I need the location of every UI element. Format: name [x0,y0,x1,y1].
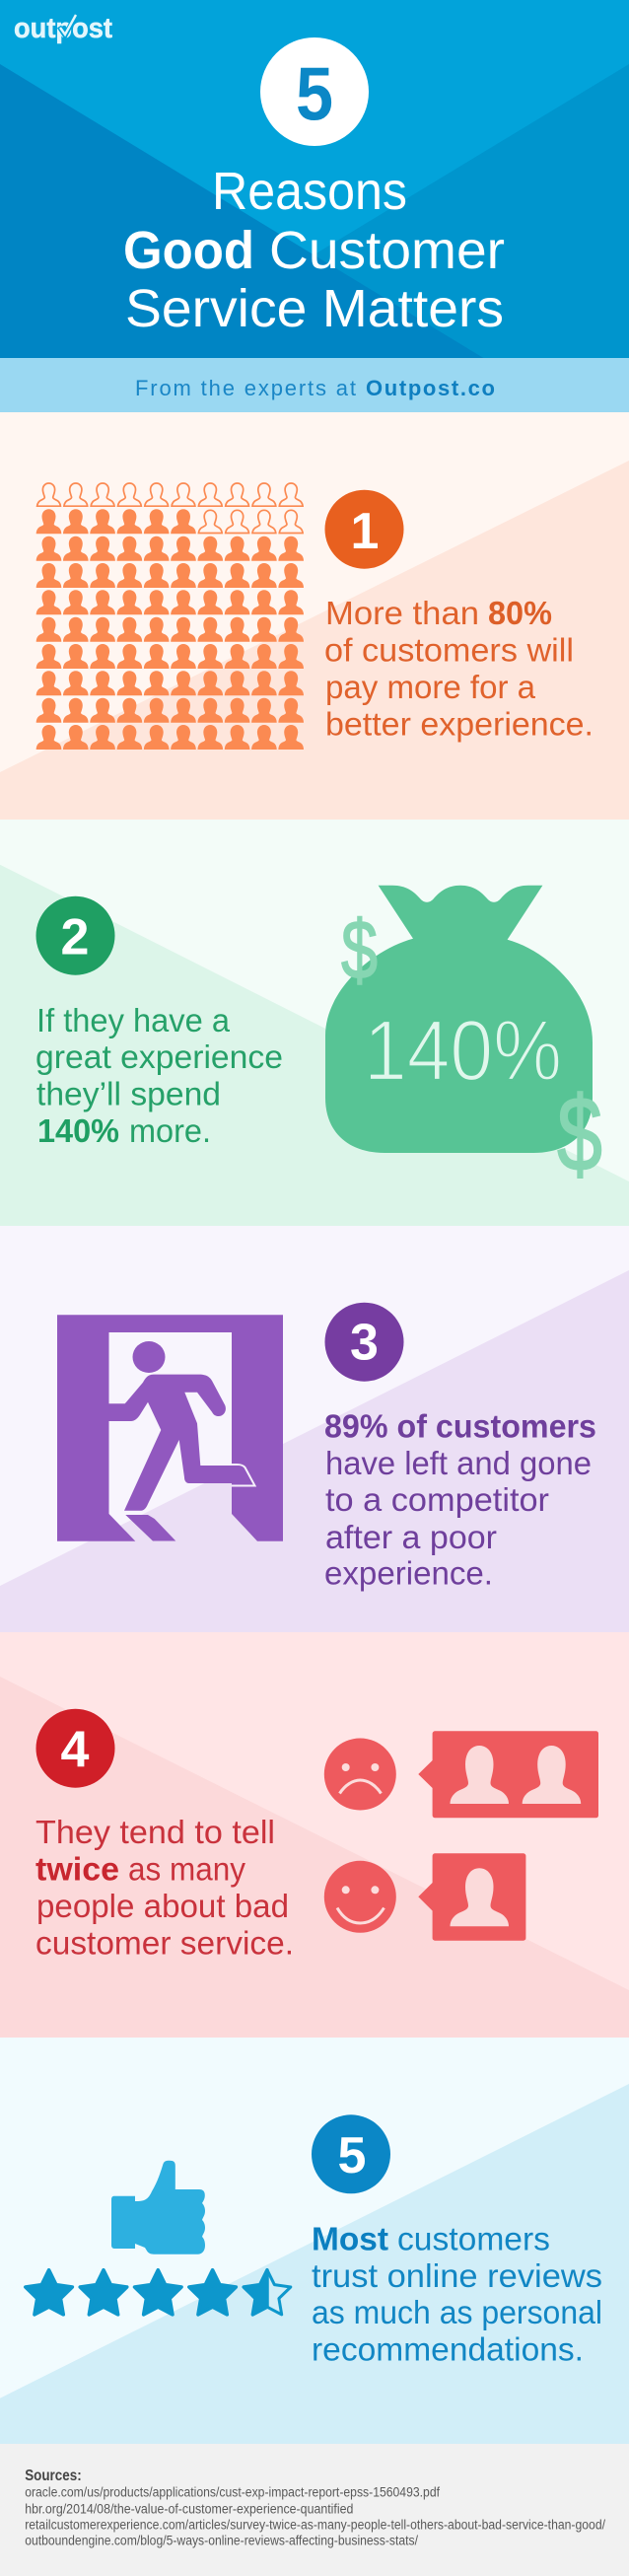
panel: reason 3 [0,1226,629,1632]
text: reason 4: as many [128,1851,245,1888]
text: reason 1: pay more for a [325,669,536,705]
header panel [0,0,629,359]
number badge: 4: 4 [61,1722,90,1779]
title: Reasons [212,162,407,221]
title: Service Matters [125,279,504,338]
text: reason 3: 89% of customers [324,1408,596,1445]
panel: reason 2 [0,820,629,1226]
subtitle band [0,358,629,412]
source links [25,2485,605,2548]
number badge: 5: 5 [338,2127,366,2184]
icon: thumbs up [111,2161,205,2254]
icon: sad face [324,1738,396,1811]
text: reason 5 [312,2221,602,2368]
text: reason 3: after a poor [325,1519,497,1555]
text: reason 3: have left and gone [325,1445,592,1481]
source links: oracle.com/us/products/applications/cust-exp-impact-report-epss-1560493.pdf [25,2485,440,2500]
icon: grid of 100 people, 86 filled [36,483,304,750]
number badge: 2 [35,896,114,975]
text: reason 2 [35,1002,283,1149]
title [123,162,505,338]
text: reason 3 [324,1408,596,1592]
number badge: 3: 3 [350,1314,379,1371]
text: reason 2: more. [129,1112,211,1149]
text: reason 3: experience. [324,1555,493,1592]
icon: money bag with 140%: 140% [364,1003,562,1099]
icon: speech bubble with two people [418,1731,598,1818]
number badge: 5 [260,37,369,146]
source links: outboundengine.com/blog/5-ways-online-reviews-affecting-business-stats/ [25,2534,418,2548]
icon: dollar sign, right: $ [557,1074,602,1193]
text: reason 5: as much as personal [312,2294,602,2330]
subtitle band: Outpost.co [366,376,495,400]
number badge: 1: 1 [351,503,379,560]
number badge: 2: 2 [61,909,89,966]
title: Good [123,221,254,280]
text: reason 2: they’ll spend [36,1076,221,1112]
number badge: 5 [312,2114,390,2193]
subtitle band: From the experts at [135,376,356,400]
text: reason 5: recommendations. [312,2331,584,2368]
text: reason 1: better experience. [325,706,594,742]
panel: sources: Sources: [25,2468,82,2484]
source links: hbr.org/2014/08/the-value-of-customer-experience-quantified [25,2501,353,2516]
text: reason 2: 140% [37,1112,119,1149]
panel: sources [0,2444,629,2576]
number badge: 3 [325,1303,404,1382]
panel: reason 1 [0,412,629,820]
title: Customer [269,221,505,280]
number badge: 5: 5 [296,53,333,136]
text: reason 2: If they have a [36,1002,231,1038]
text: reason 5: customers [397,2221,550,2257]
text: reason 4: They tend to tell [35,1814,275,1850]
text: reason 1 [324,595,594,742]
logo: outpost: outpost [14,13,112,44]
text: reason 1: More than [325,595,479,631]
number badge: 1 [325,490,404,569]
icon: dollar sign, left: $ [341,903,378,996]
text: reason 4: customer service. [35,1925,294,1962]
text: reason 5: trust online reviews [312,2257,602,2294]
panel: reason 5 [0,2038,629,2444]
panel: reason 4 [0,1632,629,2038]
icon: money bag with 140% [325,886,602,1193]
icon: happy face [324,1861,396,1933]
text: reason 4: twice [35,1851,119,1888]
number badge: 4 [35,1709,114,1788]
text: reason 4 [35,1814,294,1962]
text: reason 5: Most [312,2221,388,2257]
text: reason 4: people about bad [36,1888,289,1924]
text: reason 2: great experience [35,1038,283,1075]
icon: speech bubble with one person [418,1853,525,1941]
text: reason 1: of customers will [324,631,574,669]
text: reason 3: to a competitor [325,1481,549,1518]
icon: person running through exit door [57,1315,283,1541]
text: reason 1: 80% [488,595,552,631]
icon: star rating, 4.5 of 5 [26,2270,291,2315]
